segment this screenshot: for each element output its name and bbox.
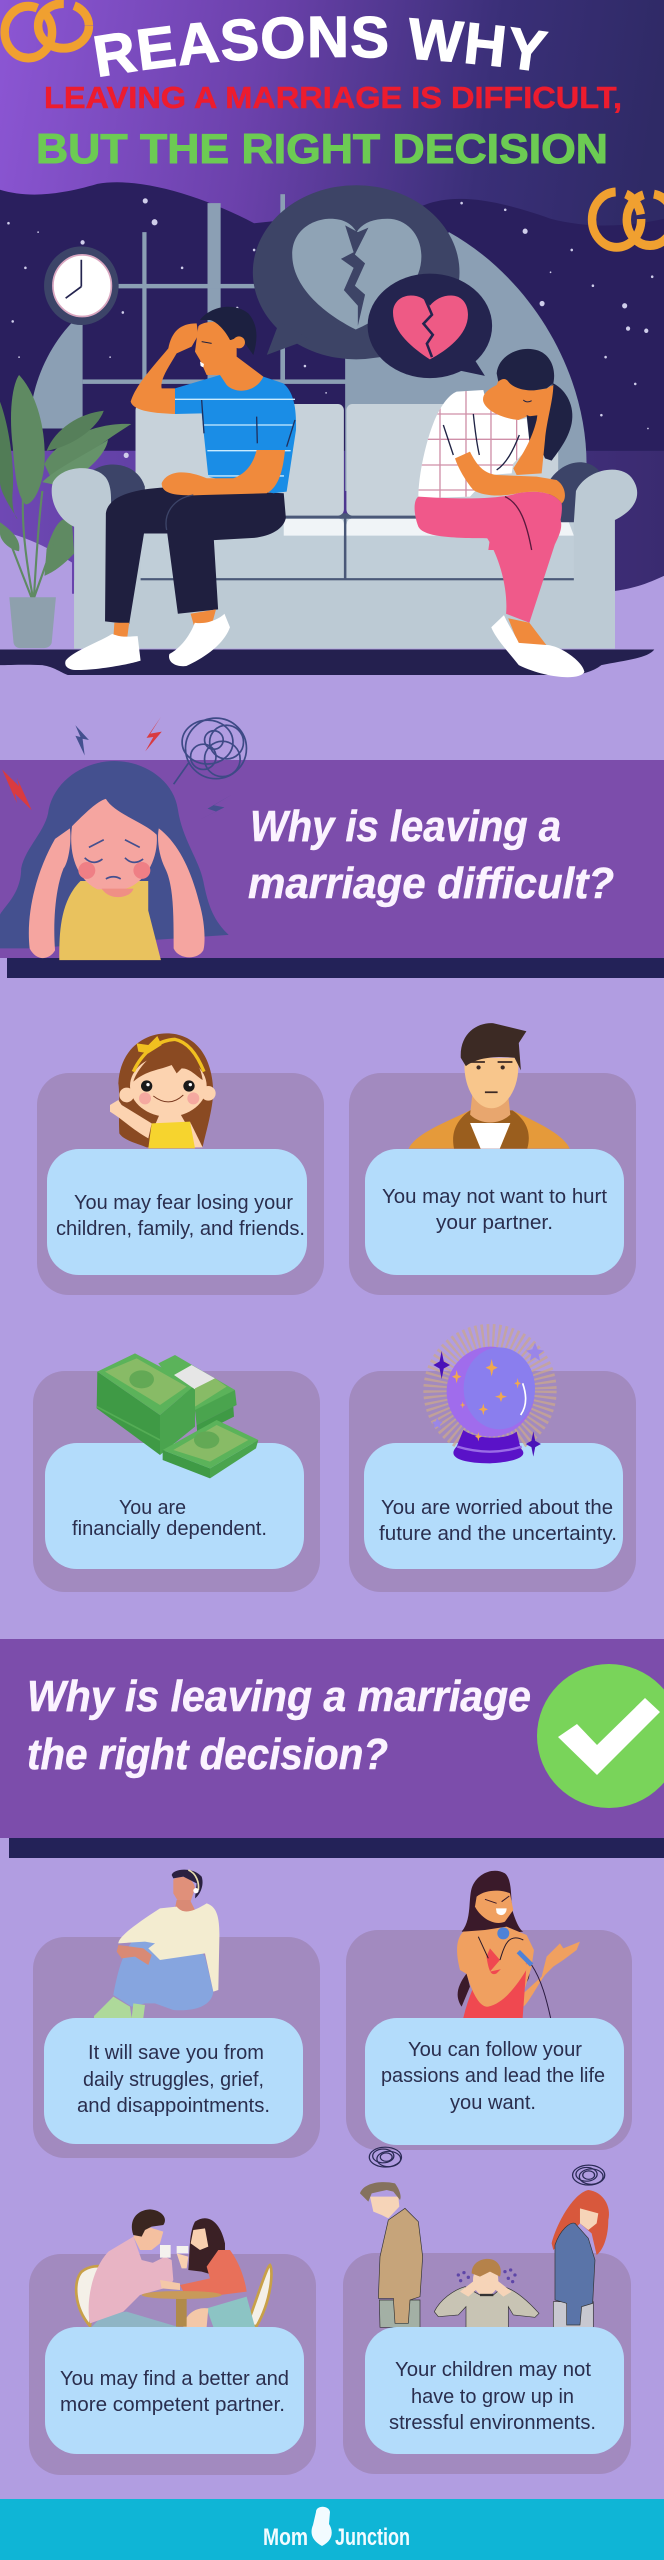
man legs and shoes — [65, 487, 286, 670]
icon: crystal ball — [432, 1336, 545, 1463]
card: children not growing up in stress: Your children may not — [395, 2359, 591, 2381]
icon: stressed girl holding head — [0, 717, 246, 960]
icon: potted plant — [0, 375, 131, 648]
card: financially dependent: financially dependent. — [72, 1518, 267, 1540]
card: financially dependent — [33, 1353, 320, 1592]
icon: logo mark — [312, 2507, 332, 2546]
icon: broken rings top right — [592, 192, 664, 247]
heading text: the right decision? — [27, 1730, 388, 1779]
card: not want to hurt partner: your partner. — [436, 1212, 553, 1234]
card: fear losing children: You may fear losing your — [74, 1192, 293, 1214]
heading text: Why is leaving a marriage — [27, 1672, 531, 1721]
heading text — [248, 802, 614, 908]
icon: wall clock — [44, 246, 119, 325]
card: children not growing up in stress — [343, 2147, 631, 2474]
icon: stress scribbles — [369, 2147, 605, 2185]
card: not want to hurt partner: You may not want to hurt — [382, 1186, 607, 1208]
card: follow your passions: passions and lead the life — [381, 2065, 605, 2087]
card: children not growing up in stress: have to grow up in — [411, 2386, 574, 2408]
card: follow your passions: you want. — [450, 2092, 536, 2114]
sofa — [52, 404, 637, 649]
banner: why leaving is the right decision — [0, 1639, 664, 1858]
card: children not growing up in stress: stressful environments. — [389, 2412, 596, 2434]
icon: stacks of money — [97, 1353, 258, 1478]
icon: man sitting with headphones — [94, 1870, 219, 2018]
floor shadow — [0, 650, 654, 675]
icon: broken rings top left — [5, 4, 89, 58]
title: reasons why: REASONS WHY — [94, 16, 549, 77]
card: find a better partner — [29, 2209, 316, 2475]
card: follow your passions — [346, 1871, 632, 2150]
heading text: marriage difficult? — [248, 859, 614, 908]
man upper body — [131, 307, 296, 530]
icon: couple at a table — [76, 2209, 271, 2327]
card: follow your passions: You can follow your — [408, 2039, 582, 2061]
speech bubble: grey broken heart — [253, 185, 459, 359]
card: financially dependent: You are — [119, 1497, 186, 1519]
woman legs and shoes — [487, 509, 584, 677]
card: worried about the future: future and the uncertainty. — [379, 1523, 617, 1545]
heading text — [27, 1672, 531, 1779]
icon: man portrait — [409, 1023, 570, 1149]
icon: green check mark — [537, 1664, 664, 1808]
subtitle: but the right decision: BUT THE RIGHT DECISION — [36, 125, 608, 172]
banner: why is leaving a marriage difficult — [0, 717, 664, 978]
card: fear losing children — [37, 1033, 324, 1295]
card: save from daily struggles: daily struggles, grief, — [83, 2069, 264, 2091]
footer: MomJunction logo: Junction — [335, 2524, 410, 2551]
card: find a better partner: more competent partner. — [60, 2394, 285, 2416]
card: not want to hurt partner — [349, 1023, 636, 1295]
family figures — [360, 2182, 609, 2327]
subtitle: leaving a marriage is difficult: LEAVING A MARRIAGE IS DIFFICULT, — [44, 80, 622, 115]
icon: upset parents and crying child — [360, 2147, 609, 2327]
card: save from daily struggles: and disappointments. — [77, 2095, 270, 2117]
footer: MomJunction logo: Mom — [263, 2524, 308, 2551]
card: worried about the future — [349, 1336, 636, 1592]
heading text: Why is leaving a — [250, 802, 561, 851]
icon: waving girl — [110, 1033, 216, 1148]
footer: MomJunction logo — [0, 2499, 664, 2560]
card: save from daily struggles — [33, 1870, 320, 2158]
card: worried about the future: You are worried about the — [381, 1497, 613, 1519]
card: fear losing children: children, family, and friends. — [56, 1218, 305, 1240]
hero illustration: couple on sofa — [0, 0, 664, 677]
speech bubble: pink broken heart — [368, 274, 492, 378]
card: save from daily struggles: It will save you from — [88, 2042, 264, 2064]
woman upper body — [415, 349, 572, 550]
card: find a better partner: You may find a better and — [60, 2368, 289, 2390]
icon: woman singing with microphone — [457, 1871, 580, 2018]
